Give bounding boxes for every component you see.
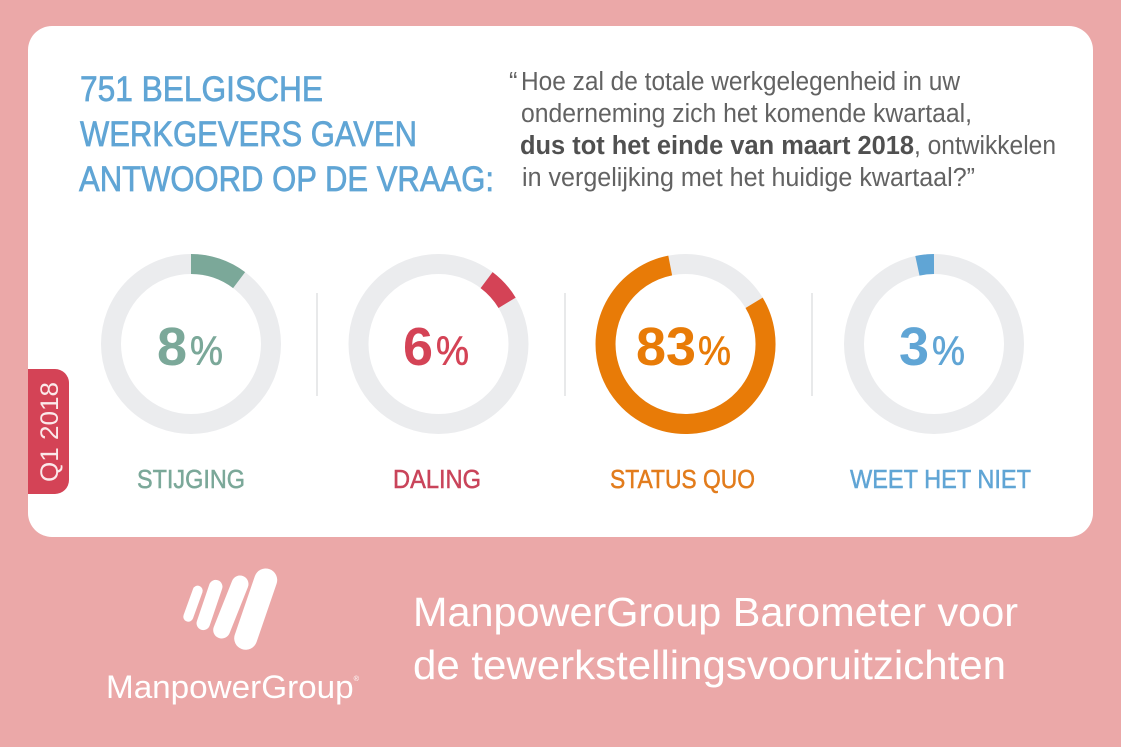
tab: quarter [28, 369, 69, 494]
donut chart: weet het niet 3%: 3 [899, 317, 929, 377]
title: barometer: de tewerkstellingsvooruitzichten [413, 642, 1006, 688]
donut chart: stijging 8%: % [190, 328, 223, 374]
label: stijging: STIJGING [137, 464, 245, 494]
label: status quo: STATUS QUO [610, 464, 755, 494]
text block: survey question: onderneming zich het komende kwartaal, [521, 100, 972, 128]
donut chart: status quo 83% [606, 264, 766, 424]
heading: respondents: WERKGEVERS GAVEN [80, 115, 417, 154]
donut chart: status quo 83%: % [698, 328, 731, 374]
text block: survey question: dus tot het einde van maart 2018 [520, 132, 914, 160]
donut chart: daling 6%: 6 [403, 317, 433, 377]
text block: survey question: , ontwikkelen [914, 132, 1056, 160]
donut chart: weet het niet 3% [854, 264, 1014, 424]
title: barometer [413, 589, 1018, 688]
text block: survey question [509, 68, 1056, 192]
text block: survey question: “ [509, 68, 518, 96]
title: barometer: ManpowerGroup Barometer voor [413, 589, 1018, 635]
text block: survey question: Hoe zal de totale werkgelegenheid in uw [521, 68, 961, 96]
label: weet het niet: WEET HET NIET [850, 464, 1031, 494]
text block: survey question: in vergelijking met het huidige kwartaal?” [522, 164, 975, 192]
icon: logo bars [188, 580, 266, 638]
heading: respondents: ANTWOORD OP DE VRAAG: [79, 160, 494, 199]
tab: quarter: Q1 2018 [36, 382, 64, 482]
donut chart: weet het niet 3%: % [932, 328, 965, 374]
logo wordmark: ® [354, 675, 360, 683]
donut chart: daling 6% [358, 264, 518, 424]
label: daling: DALING [393, 464, 481, 494]
logo wordmark: ManpowerGroup [106, 669, 344, 705]
donut chart: stijging 8%: 8 [157, 317, 187, 377]
donut chart: daling 6%: % [436, 328, 469, 374]
donut chart: status quo 83%: 83 [636, 317, 696, 377]
donut chart: stijging 8% [111, 264, 271, 424]
heading: respondents: 751 BELGISCHE [80, 70, 323, 109]
heading: respondents [79, 70, 494, 199]
panel: survey results card [28, 26, 1093, 537]
logo: ManpowerGroup [106, 580, 360, 705]
